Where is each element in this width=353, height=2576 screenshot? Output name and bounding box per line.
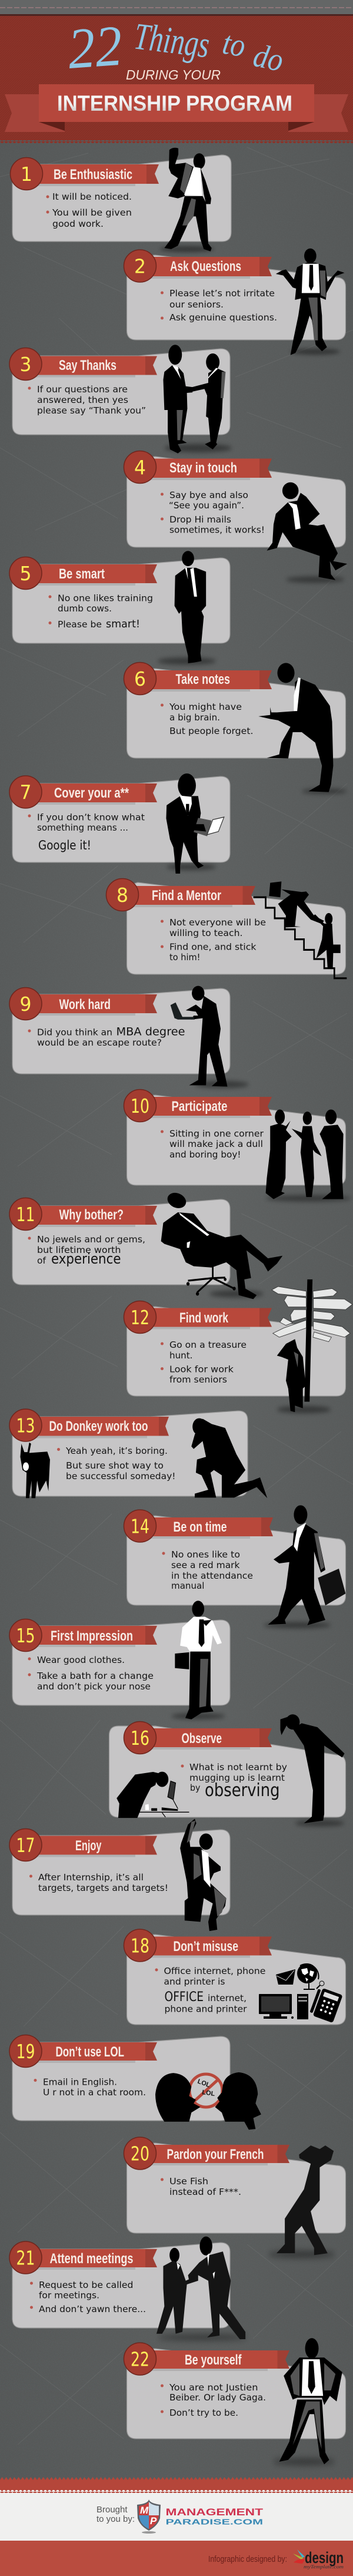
program title: INTERNSHIP PROGRAM (57, 91, 292, 115)
panel: step 9 (9, 986, 249, 1088)
bullets: Find one, and stick (169, 941, 257, 952)
number badge (124, 1301, 156, 1334)
panel: step 18 (124, 1929, 346, 2025)
card (109, 1726, 346, 1817)
number badge: 13 (16, 1414, 35, 1437)
heading: Do Donkey work too (49, 1418, 148, 1434)
panel: step 15 (9, 1601, 230, 1719)
heading: Find work (179, 1310, 228, 1326)
bullets: in the attendance (171, 1570, 253, 1581)
number badge: 5 (20, 562, 32, 585)
figure: two men shaking hands (156, 2237, 248, 2340)
bullets: our seniors. (169, 299, 224, 310)
logo: design: myTemplate.com (304, 2564, 344, 2570)
ribbon (35, 1417, 169, 1439)
bullets: mugging up is learnt (189, 1773, 285, 1783)
figure: three people talking (266, 1109, 351, 1202)
card (12, 349, 230, 435)
bullets: see a red mark (171, 1560, 240, 1570)
ribbon (35, 164, 159, 186)
bullets (161, 2176, 241, 2197)
icon: globe and envelope (276, 1963, 324, 1989)
card (12, 1830, 230, 1915)
bullets (161, 490, 265, 535)
figure: mentor on stairs (254, 881, 347, 978)
bullets: You are not Justien (169, 2382, 258, 2393)
bullets: Sitting in one corner (169, 1129, 264, 1139)
bullets: hunt. (169, 1350, 193, 1361)
designer credit: Infographic designed by: (208, 2554, 287, 2564)
bullets: will make jack a dull (169, 1139, 263, 1149)
number badge: 22 (131, 2348, 149, 2370)
bullets: Yeah yeah, it’s boring. (65, 1446, 168, 1456)
ribbon (132, 886, 255, 907)
bullets: Please be (58, 619, 102, 630)
panel: step 19 (9, 2035, 261, 2129)
number badge (9, 1198, 42, 1230)
bullets: Google it! (38, 838, 91, 852)
bullets: experience (51, 1251, 121, 1267)
ribbon (35, 1206, 157, 1227)
bullets: a big brain. (169, 712, 220, 723)
panel: step 5 (9, 551, 230, 665)
bullets (181, 1762, 287, 1801)
bullets: to him! (169, 952, 200, 963)
bullets: OFFICE (165, 1990, 204, 2005)
icon: computer (259, 1994, 308, 2019)
bullets: No jewels and or gems, (37, 1234, 145, 1245)
panel: step 17 (9, 1818, 230, 1931)
icon: no LOL sign (189, 2074, 222, 2107)
panel: step 6 (124, 662, 347, 794)
bullets (161, 2382, 266, 2418)
number badge: 17 (16, 1834, 35, 1857)
sponsor label: to you by: (96, 2514, 135, 2524)
bullets (161, 702, 253, 736)
bullets (161, 288, 277, 323)
number badge (9, 1409, 42, 1441)
bullets: by (190, 1783, 200, 1793)
bullets: Not everyone will be (169, 917, 266, 928)
number badge (9, 776, 42, 808)
number badge: 9 (20, 993, 32, 1016)
bullets: If you don’t know what (37, 812, 145, 822)
number badge (124, 1929, 156, 1962)
number badge: 11 (16, 1203, 35, 1226)
bullets: But people forget. (169, 726, 253, 736)
card (127, 2143, 346, 2233)
bullets: phone and printer (165, 2004, 247, 2015)
card (12, 1620, 230, 1705)
heading: Work hard (59, 997, 111, 1013)
number badge (9, 1619, 42, 1652)
panel: step 3 (9, 345, 232, 454)
bullets: but lifetime worth (37, 1245, 121, 1255)
panel: step 14 (124, 1505, 346, 1628)
number badge (124, 1510, 156, 1542)
number badge (124, 1721, 156, 1754)
figure: walking man with briefcase (264, 1505, 345, 1628)
card (12, 2036, 230, 2121)
number badge: 3 (20, 353, 32, 376)
number badge: 7 (20, 781, 32, 803)
ribbon (35, 2042, 157, 2063)
ribbon (150, 1308, 272, 1329)
panel: step 13 (9, 1409, 267, 1498)
bullets (28, 384, 146, 416)
ribbon (35, 1626, 157, 1647)
bullets (28, 1655, 154, 1692)
number badge: 18 (131, 1935, 149, 1957)
card (12, 558, 230, 643)
bullets: for meetings. (39, 2290, 99, 2301)
figure: frustrated man with laptop (171, 986, 249, 1088)
figure: enthusiastic man (160, 148, 214, 252)
ribbon (35, 783, 157, 805)
heading: Don’t use LOL (55, 2044, 124, 2060)
bullets: U r not in a chat room. (43, 2087, 146, 2098)
heading: Be yourself (185, 2352, 242, 2368)
card (127, 1307, 346, 1396)
panel: step 12 (124, 1279, 352, 1413)
heading: Cover your a** (54, 785, 129, 801)
bullets: Beiber. Or lady Gaga. (169, 2392, 266, 2403)
title: do: do (250, 37, 287, 79)
bullets: You might have (169, 702, 242, 712)
card (12, 155, 231, 242)
bullets (30, 2280, 146, 2314)
bullets: answered, then yes (37, 395, 128, 405)
figure: man sitting on phone (267, 482, 347, 583)
ribbon (150, 458, 272, 480)
bullets: and printer is (164, 1976, 225, 1987)
figure: man opening jacket (272, 2338, 342, 2465)
bullets: And don’t yawn there... (39, 2304, 146, 2314)
ribbon (150, 257, 272, 279)
bullets: targets, targets and targets! (38, 1883, 168, 1893)
number badge (124, 2343, 156, 2375)
bullets (29, 1872, 168, 1893)
card (127, 1095, 346, 1185)
card (127, 255, 346, 340)
bullets: smart! (106, 618, 140, 630)
ribbon (150, 2350, 289, 2371)
number badge (11, 158, 42, 190)
top stitched strip (0, 0, 353, 15)
number badge: 14 (131, 1515, 149, 1537)
card (12, 1199, 230, 1285)
bullets: observing (205, 1780, 280, 1801)
bottom red band (0, 2541, 353, 2576)
panel: step 4 (124, 451, 347, 583)
number badge (9, 987, 42, 1020)
bullets: If our questions are (37, 384, 128, 395)
number badge: 15 (16, 1624, 35, 1647)
bullets: MBA degree (116, 1025, 185, 1038)
panel: step 20 (124, 2137, 346, 2258)
heading: Take notes (175, 672, 230, 687)
number badge: 4 (134, 456, 146, 479)
number badge: 21 (16, 2247, 35, 2269)
ribbon (150, 1097, 272, 1118)
number badge: 20 (131, 2142, 149, 2165)
ribbon fold shadows (39, 122, 314, 131)
panel: step 11 (9, 1191, 282, 1299)
number badge: 8 (116, 884, 128, 907)
bullets: You will be given (52, 207, 132, 218)
number badge: 16 (131, 1727, 149, 1750)
heading: Participate (172, 1099, 227, 1115)
ribbon (150, 1937, 272, 1958)
bullets: It will be noticed. (52, 191, 132, 202)
bullets: and don’t pick your nose (37, 1681, 151, 1692)
header banner (0, 14, 353, 143)
bullets: Ask genuine questions. (169, 312, 277, 323)
number badge: 10 (131, 1094, 149, 1117)
heading: Enjoy (75, 1838, 102, 1854)
figure: kneeling man (191, 1418, 267, 1498)
heading: Be smart (59, 566, 105, 582)
title: 22: 22 (66, 14, 124, 81)
number badge (124, 2137, 156, 2170)
bullets: good work. (52, 219, 104, 229)
logo: shield (137, 2499, 161, 2534)
number badge (124, 250, 156, 282)
figure: standing man in suit (158, 551, 216, 665)
figure: man in white shirt (171, 1601, 225, 1719)
ribbon (150, 1517, 273, 1539)
title: to: to (220, 25, 248, 64)
panel: step 10 (124, 1090, 351, 1202)
ribbon (35, 564, 157, 586)
number badge (106, 879, 139, 911)
ribbon (150, 670, 272, 692)
number badge (9, 1828, 42, 1861)
bullets (57, 1446, 175, 1482)
bullets (155, 1966, 266, 2015)
ribbon (150, 2145, 289, 2165)
logo: design (293, 2549, 344, 2570)
logo: shield: P (150, 2515, 157, 2527)
number badge (124, 451, 156, 483)
bullets: After Internship, it’s all (38, 1872, 144, 1883)
bullets: and boring boy! (169, 1149, 241, 1160)
figure: man peering into distance (280, 1714, 345, 1826)
figure: jumping man (180, 1818, 227, 1931)
number badge: 1 (21, 163, 32, 186)
number badge (124, 662, 156, 695)
card (12, 1411, 248, 1496)
heading: Pardon your French (167, 2147, 264, 2162)
card (12, 2243, 230, 2328)
bullets: dumb cows. (58, 603, 112, 614)
bullets: from seniors (169, 1374, 227, 1385)
bullets (161, 1340, 247, 1385)
figure: man drinking (268, 2145, 335, 2258)
icon: no LOL sign: LOL (197, 2078, 211, 2089)
panel: step 22 (124, 2338, 346, 2465)
figure: man taking notes (258, 663, 347, 794)
bullets (46, 191, 132, 229)
heading: Attend meetings (49, 2251, 133, 2267)
heading: Be Enthusiastic (54, 167, 132, 183)
ribbon (35, 356, 157, 377)
heading: Don’t misuse (173, 1939, 238, 1955)
ribbon (35, 2249, 157, 2270)
icon: no LOL sign: LOL (202, 2089, 215, 2098)
icon: telephone (309, 1986, 343, 2023)
bullets: Look for work (169, 1364, 234, 1375)
panel: step 21 (9, 2237, 248, 2340)
logo: PARADISE.COM: PARADISE.COM (166, 2518, 263, 2526)
card (127, 2349, 346, 2439)
bullets (28, 812, 145, 852)
bullets: Wear good clothes. (37, 1655, 125, 1665)
bullets: Go on a treasure (169, 1340, 247, 1350)
bullets: Email in English. (43, 2077, 117, 2088)
bullets: Did you think an (37, 1027, 112, 1038)
panel: step 2 (124, 249, 346, 355)
ribbon (35, 1836, 157, 1857)
card (127, 1935, 346, 2025)
logo: shield: M (140, 2505, 149, 2516)
card (127, 457, 346, 547)
bullets: Drop Hi mails (169, 514, 231, 525)
figure: man looking at monitor (116, 1772, 189, 1818)
card (12, 776, 230, 862)
card (127, 669, 346, 758)
number badge (9, 557, 42, 589)
heading: Be on time (173, 1519, 227, 1535)
bullets: Office internet, phone (164, 1966, 266, 1976)
title: Things: Things (132, 15, 212, 65)
heading: Ask Questions (170, 259, 241, 275)
number badge (9, 348, 42, 381)
number badge: 19 (16, 2040, 35, 2063)
heading: Say Thanks (59, 358, 116, 373)
card (127, 882, 346, 974)
bullets: Request to be called (39, 2280, 133, 2290)
number badge: 2 (134, 254, 146, 278)
number badge: 6 (134, 667, 146, 690)
heading: Why bother? (59, 1207, 124, 1223)
bullets (34, 2077, 146, 2098)
bullets (162, 1549, 253, 1591)
card (12, 988, 230, 1074)
bullets: willing to teach. (169, 928, 242, 938)
bullets (161, 1129, 264, 1160)
figure: shrugging man (276, 249, 345, 355)
bullets: something means ... (37, 822, 128, 833)
bullets: sometimes, it works! (169, 524, 265, 535)
panel: step 8 (106, 879, 347, 978)
panel: step 16 (109, 1714, 346, 1826)
bullets: be successful someday! (66, 1471, 175, 1482)
ribbon right tail (288, 94, 348, 132)
ribbon (150, 1728, 272, 1750)
figure: man with laptop (166, 773, 224, 874)
bullets (48, 593, 153, 630)
logo: MANAGEMENT: MANAGEMENT (166, 2506, 264, 2518)
bullets (161, 917, 266, 963)
heading: Stay in touch (169, 460, 237, 476)
subtitle: DURING YOUR (126, 67, 221, 82)
footer (0, 2477, 353, 2576)
heading: Observe (181, 1731, 222, 1747)
bullets: instead of F***. (169, 2187, 241, 2197)
bullets: What is not learnt by (189, 1762, 287, 1773)
ribbon body (39, 84, 314, 122)
bullets: manual (171, 1580, 205, 1591)
bullets: No one likes training (58, 593, 153, 603)
bullets: please say “Thank you” (37, 405, 146, 416)
bullets: “See you again”. (169, 500, 244, 511)
bullets: But sure shot way to (66, 1460, 164, 1471)
panel: step 1 (11, 148, 231, 252)
bullets: Take a bath for a change (36, 1671, 154, 1681)
number badge: 12 (131, 1306, 149, 1329)
sponsor label: Brought (96, 2505, 128, 2515)
bullets: would be an escape route? (37, 1037, 162, 1048)
ribbon (35, 994, 157, 1016)
bullets: No ones like to (171, 1549, 240, 1560)
card (127, 1516, 346, 1605)
figure: man reclining in chair (161, 1191, 282, 1299)
bullets: of (37, 1255, 46, 1266)
ribbon left tail (5, 94, 65, 132)
bullets: Use Fish (169, 2176, 208, 2187)
figure: donkey (20, 1443, 50, 1498)
bullets: internet, (208, 1993, 247, 2003)
bullets (28, 1025, 185, 1048)
panel: step 7 (9, 773, 230, 874)
bullets (28, 1234, 145, 1267)
heading: First Impression (51, 1628, 133, 1644)
number badge (124, 1090, 156, 1122)
heading: Find a Mentor (152, 888, 221, 904)
bullets: Please let’s not irritate (169, 288, 275, 299)
red zigzag band (0, 2477, 353, 2541)
figure: man at signpost (272, 1279, 352, 1413)
bullets: Don’t try to be. (169, 2408, 238, 2418)
bullets: Say bye and also (169, 490, 248, 501)
figure: two heads shouting (155, 2072, 261, 2129)
number badge (9, 2241, 42, 2274)
figure: handshake (163, 345, 232, 454)
number badge (9, 2035, 42, 2068)
